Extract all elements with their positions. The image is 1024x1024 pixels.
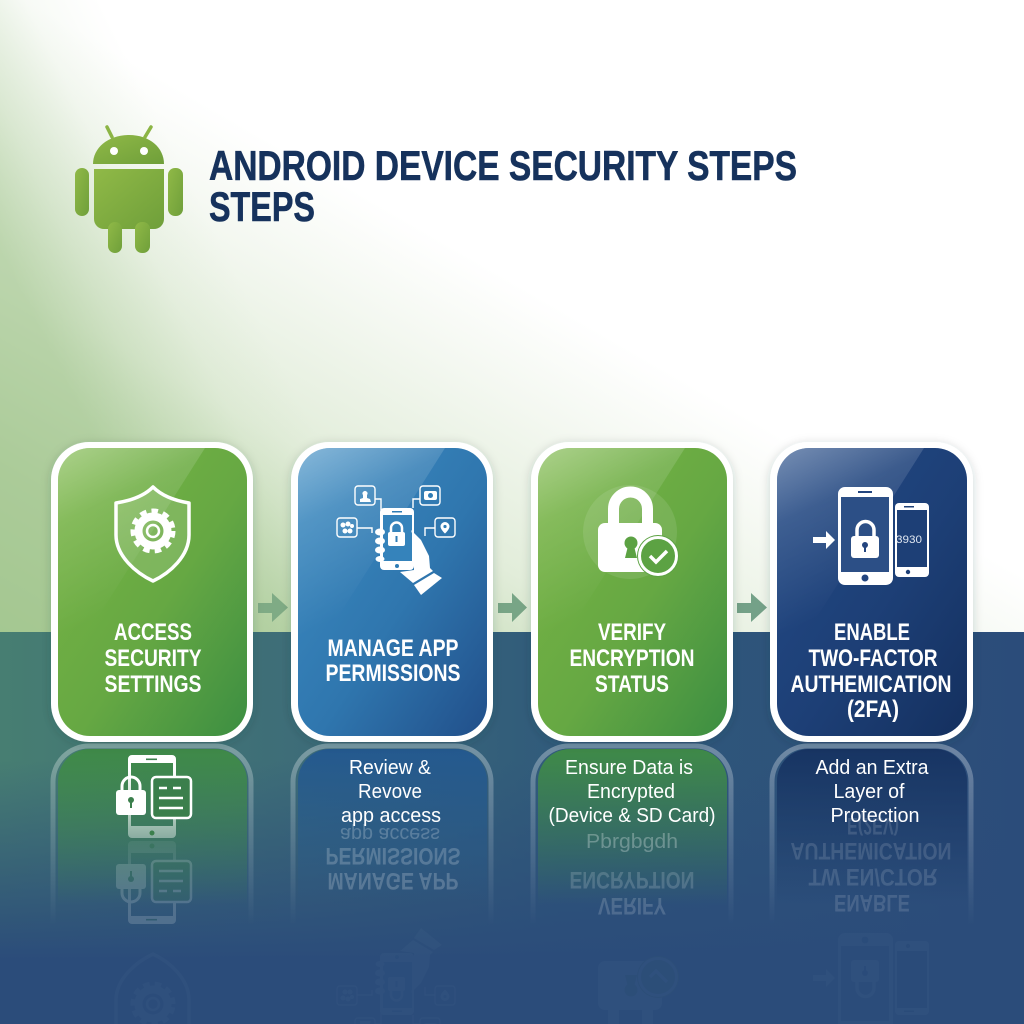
- reflection: card 1: [53, 746, 251, 1024]
- reflection: card 4: ENABLE: [834, 889, 910, 916]
- card 2 gloss: [298, 448, 445, 600]
- title: STEPS: [209, 183, 315, 230]
- card 2 heading: [326, 635, 460, 687]
- reflection: card 4: TW EN/CTOR: [808, 863, 938, 890]
- card 1 heading: [104, 619, 202, 698]
- card 4 heading: ENABLE: [834, 619, 910, 646]
- panel: enable two-factor authentication: [770, 442, 973, 742]
- card 1 heading: ACCESS: [114, 619, 192, 646]
- text: extra layer of protection: Layer of: [834, 781, 905, 803]
- arrow: step 1 to 2: [258, 593, 288, 622]
- text: ensure data encrypted: Encrypted: [587, 781, 675, 803]
- card 4 heading: [790, 619, 952, 723]
- reflection: card 3: ENCRYPTION: [570, 866, 694, 893]
- card 3 gloss: [538, 448, 685, 598]
- text: ensure data encrypted: (Device & SD Card): [548, 805, 716, 827]
- text: review and revoke: Review &: [349, 757, 432, 779]
- icon: hand holding locked phone: [337, 486, 455, 595]
- card 4 heading: AUTHEMICATION: [790, 671, 952, 698]
- text: extra layer of protection: Add an Extra: [816, 757, 929, 779]
- card 2 heading: PERMISSIONS: [326, 660, 460, 687]
- card 3 heading: STATUS: [595, 671, 669, 698]
- title: ANDROID DEVICE SECURITY STEPS: [209, 142, 797, 189]
- panel: access security settings: [51, 442, 253, 742]
- reflection: card 3: [533, 746, 731, 1024]
- card 3 heading: ENCRYPTION: [570, 645, 694, 672]
- panel: verify encryption status: [531, 442, 733, 742]
- icon: two phones with lock and code: [813, 487, 929, 585]
- icon: android robot: [75, 127, 183, 253]
- reflection: card 3: Pbrgbgdh: [586, 831, 678, 853]
- reflection: card 4: E(2EV): [847, 812, 899, 839]
- card 1 gloss: [58, 448, 205, 598]
- card 4 heading: (2FA): [847, 696, 899, 723]
- text: ensure data encrypted: [548, 757, 716, 827]
- reflection: card 2: [293, 746, 491, 1024]
- card 3 heading: VERIFY: [598, 619, 666, 646]
- text: review and revoke: app access: [341, 805, 441, 827]
- reflection: card 2: MANAGE APP: [328, 867, 458, 894]
- text: review and revoke: Revove: [358, 781, 422, 803]
- reflection: card 4: AUTHEMICATION: [790, 837, 952, 864]
- arrow: step 3 to 4: [737, 593, 767, 622]
- text: review and revoke: [341, 757, 441, 827]
- card 3 heading: [570, 619, 694, 698]
- text: ensure data encrypted: Ensure Data is: [565, 757, 693, 779]
- icon: padlock with check: [583, 485, 679, 579]
- title: [209, 142, 797, 230]
- text: extra layer of protection: Protection: [830, 805, 920, 827]
- panel: manage app permissions: [291, 442, 493, 742]
- reflection: card 2: PERMISSIONS: [326, 842, 460, 869]
- card 1 heading: SETTINGS: [104, 671, 202, 698]
- arrow: step 2 to 3: [498, 593, 527, 622]
- reflection: card 4: [772, 746, 971, 1024]
- card 4 heading: TWO-FACTOR: [808, 645, 938, 672]
- card 2 heading: MANAGE APP: [328, 635, 458, 662]
- background: light gradient upper section: [0, 0, 1024, 632]
- background: dark lower section: [0, 632, 1024, 1024]
- card 4 gloss: [777, 448, 924, 604]
- icon: two phones with lock and code: 3930: [896, 534, 922, 546]
- card 1 heading: SECURITY: [104, 645, 202, 672]
- text: extra layer of protection: [816, 757, 929, 827]
- icon: shield with gear: [116, 487, 189, 581]
- reflection: card 2: app access: [340, 823, 440, 845]
- reflection: card 3: VERIFY: [598, 892, 666, 919]
- icon: phone with lock and document: [116, 755, 191, 838]
